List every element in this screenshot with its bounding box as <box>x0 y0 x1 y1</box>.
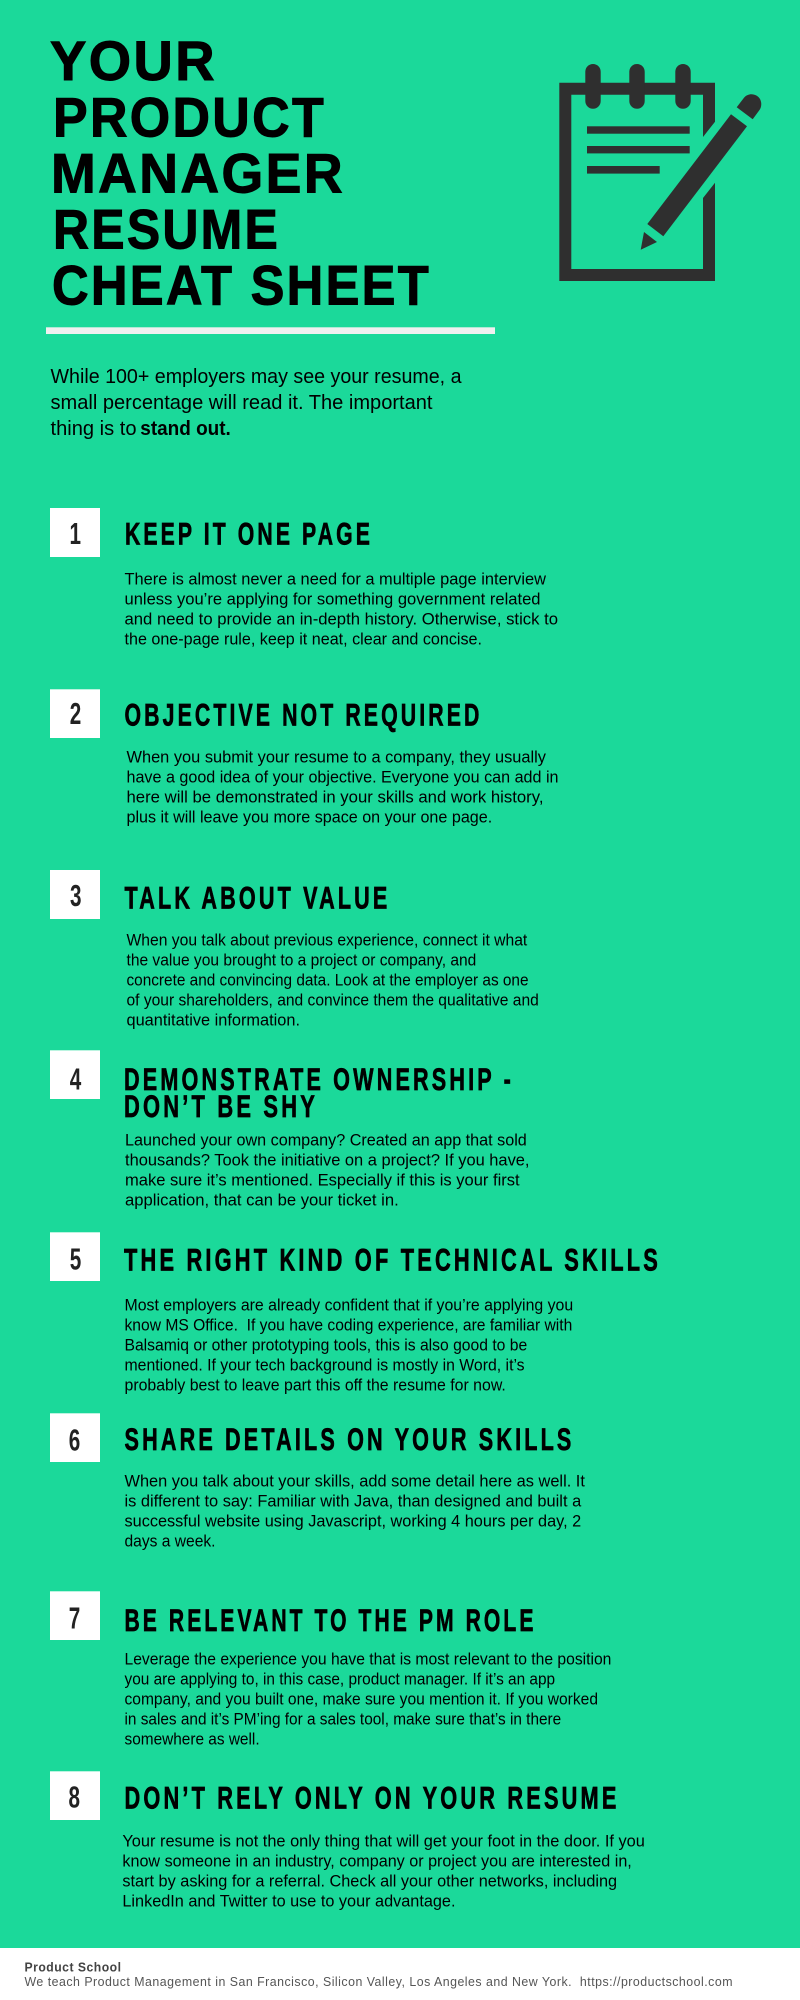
body text 6: days a week. <box>124 1532 216 1550</box>
body text 6: successful website using Javascript, working 4 hours per day, 2 <box>124 1512 581 1530</box>
body text 6 <box>124 1472 585 1550</box>
panel: tip 7 <box>50 1591 611 1749</box>
body text 3: the value you brought to a project or company, and <box>126 952 476 970</box>
footer <box>0 1948 800 2000</box>
intro text: While 100+ employers may see your resume, a <box>50 366 462 388</box>
footer tagline: We teach Product Management in San Francisco, Silicon Valley, Los Angeles and New York. https://productschool.com <box>24 1975 733 1989</box>
body text 8: LinkedIn and Twitter to use to your advantage. <box>122 1892 456 1910</box>
body text 5: Most employers are already confident that if you’re applying you <box>124 1297 573 1315</box>
body text 7: in sales and it’s PM’ing for a sales tool, make sure that’s in there <box>124 1711 561 1729</box>
body text 5: know MS Office. If you have coding experience, are familiar with <box>124 1317 572 1335</box>
heading 7: BE RELEVANT TO THE PM ROLE <box>124 1602 536 1638</box>
number badge 6 <box>50 1413 100 1462</box>
heading 2: OBJECTIVE NOT REQUIRED <box>124 697 482 733</box>
panel: tip 5 <box>50 1232 661 1395</box>
body text 2: here will be demonstrated in your skills and work history, <box>126 789 544 807</box>
body text 4: make sure it’s mentioned. Especially if this is your first <box>125 1171 520 1189</box>
body text 6: When you talk about your skills, add some detail here as well. It <box>124 1472 585 1490</box>
number badge 1 <box>50 508 100 557</box>
number badge 8 <box>50 1771 100 1820</box>
number badge 6: 6 <box>69 1423 80 1458</box>
body text 7: Leverage the experience you have that is most relevant to the position <box>124 1651 611 1669</box>
number badge 2: 2 <box>70 696 81 731</box>
body text 4: application, that can be your ticket in. <box>125 1191 399 1209</box>
body text 5: mentioned. If your tech background is mostly in Word, it’s <box>124 1357 525 1375</box>
body text 2: plus it will leave you more space on your one page. <box>126 809 492 827</box>
title: YOUR <box>50 29 217 92</box>
heading 4: DEMONSTRATE OWNERSHIP - <box>124 1061 514 1097</box>
body text 3: quantitative information. <box>126 1012 300 1030</box>
number badge 4 <box>50 1050 100 1099</box>
title: RESUME <box>53 198 280 260</box>
heading 6: SHARE DETAILS ON YOUR SKILLS <box>124 1421 574 1457</box>
number badge 3: 3 <box>70 878 82 913</box>
body text 4 <box>125 1131 530 1209</box>
body text 1: and need to provide an in-depth history. Otherwise, stick to <box>124 611 558 629</box>
heading 4: DON’T BE SHY <box>124 1088 318 1124</box>
body text 5: probably best to leave part this off the resume for now. <box>124 1377 506 1395</box>
number badge 7: 7 <box>69 1600 80 1635</box>
body text 7: company, and you built one, make sure you mention it. If you worked <box>124 1691 598 1709</box>
number badge 5: 5 <box>70 1241 81 1276</box>
panel: tip 6 <box>50 1413 585 1550</box>
body text 5 <box>124 1297 573 1395</box>
body text 7: somewhere as well. <box>124 1731 260 1749</box>
body text 1 <box>124 571 558 649</box>
body text 8 <box>122 1832 645 1910</box>
number badge 4: 4 <box>70 1061 82 1096</box>
title: CHEAT SHEET <box>52 254 431 316</box>
body text 1: unless you’re applying for something government related <box>124 591 540 609</box>
body text 5: Balsamiq or other prototyping tools, this is also good to be <box>124 1337 527 1355</box>
body text 7 <box>124 1651 611 1749</box>
number badge 8: 8 <box>68 1780 80 1815</box>
body text 8: Your resume is not the only thing that will get your foot in the door. If you <box>122 1832 645 1850</box>
body text 1: the one-page rule, keep it neat, clear and concise. <box>124 631 482 649</box>
number badge 5 <box>50 1232 100 1281</box>
footer brand name: Product School <box>24 1960 122 1974</box>
body text 2: have a good idea of your objective. Everyone you can add in <box>126 769 558 787</box>
panel: tip 4 <box>50 1050 530 1209</box>
body text 8: start by asking for a referral. Check all your other networks, including <box>122 1872 617 1890</box>
heading 1: KEEP IT ONE PAGE <box>125 515 373 551</box>
intro text: thing is to <box>50 418 136 440</box>
body text 4: Launched your own company? Created an app that sold <box>125 1131 527 1149</box>
panel: tip 2 <box>50 689 558 827</box>
body text 3 <box>126 932 539 1030</box>
intro text: small percentage will read it. The important <box>50 392 433 414</box>
title: MANAGER <box>51 142 345 204</box>
title: PRODUCT <box>53 86 326 148</box>
body text 7: you are applying to, in this case, product manager. If it’s an app <box>124 1671 555 1689</box>
body text 6: is different to say: Familiar with Java, than designed and built a <box>124 1492 582 1510</box>
number badge 7 <box>50 1591 100 1640</box>
body text 8: know someone in an industry, company or project you are interested in, <box>122 1852 632 1870</box>
body text 3: concrete and convincing data. Look at the employer as one <box>126 972 528 990</box>
heading 4 <box>124 1061 514 1124</box>
body text 3: When you talk about previous experience, connect it what <box>126 932 528 950</box>
body text 4: thousands? Took the initiative on a project? If you have, <box>125 1151 530 1169</box>
title <box>50 29 431 316</box>
heading 3: TALK ABOUT VALUE <box>124 879 390 915</box>
intro text: stand out. <box>140 418 231 440</box>
body text 2 <box>126 749 558 827</box>
body text 1: There is almost never a need for a multiple page interview <box>124 571 546 589</box>
number badge 2 <box>50 689 100 738</box>
icon: notepad and pencil <box>559 64 761 281</box>
body text 3: of your shareholders, and convince them the qualitative and <box>126 992 539 1010</box>
intro text <box>50 366 462 440</box>
body text 2: When you submit your resume to a company, they usually <box>126 749 547 767</box>
number badge 3 <box>50 870 100 919</box>
divider rule <box>46 327 495 334</box>
panel: tip 1 <box>50 508 558 649</box>
panel: tip 3 <box>50 870 539 1030</box>
number badge 1: 1 <box>70 516 81 551</box>
panel: tip 8 <box>50 1771 645 1910</box>
